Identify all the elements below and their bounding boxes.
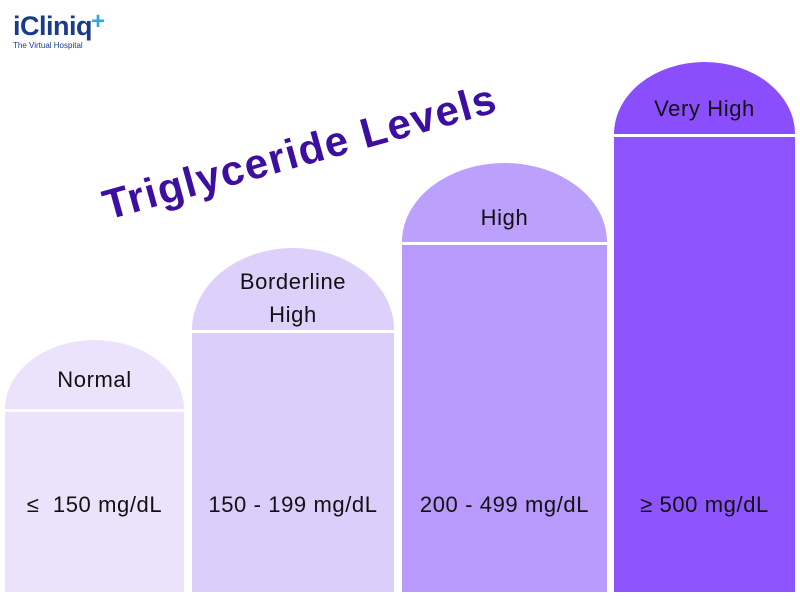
column: borderline high: High [269, 302, 317, 327]
logo: + [91, 8, 105, 35]
column: very high: Very High [654, 96, 755, 121]
column: high: High [481, 205, 528, 230]
column: borderline high: Borderline [240, 269, 346, 294]
column: high: 200 - 499 mg/dL [420, 492, 589, 517]
column: normal: ≤ 150 mg/dL [27, 492, 162, 517]
column: very high: ≥ 500 mg/dL [640, 492, 769, 517]
logo: The Virtual Hospital [13, 41, 83, 50]
logo [13, 8, 105, 50]
logo: iCliniq [13, 11, 92, 41]
column: borderline high: 150 - 199 mg/dL [208, 492, 378, 517]
column: normal: Normal [57, 367, 132, 392]
title: Triglyceride Levels [98, 75, 502, 229]
